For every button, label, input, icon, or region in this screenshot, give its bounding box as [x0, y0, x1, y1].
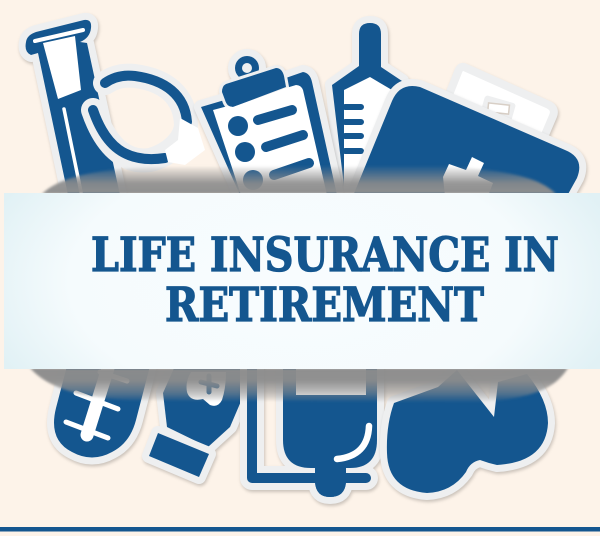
icon: clipboard — [201, 56, 337, 195]
icon: medicine bottle — [149, 366, 256, 477]
icon: medical case — [353, 86, 579, 196]
shadow below banner — [30, 368, 568, 402]
icon: document card — [435, 67, 554, 170]
icon: thermometer — [332, 23, 410, 195]
shadow above banner — [42, 166, 556, 194]
icon: lower test tube — [54, 366, 150, 458]
icon: heart — [387, 370, 548, 493]
icon: stand and fluid bag — [252, 366, 377, 497]
case cross — [443, 157, 493, 196]
title: RETIREMENT — [165, 277, 484, 332]
title banner — [4, 193, 600, 369]
icon: test tube — [26, 20, 120, 195]
icon: stethoscope — [93, 76, 205, 165]
bottom rule — [0, 527, 600, 532]
title — [91, 227, 559, 332]
